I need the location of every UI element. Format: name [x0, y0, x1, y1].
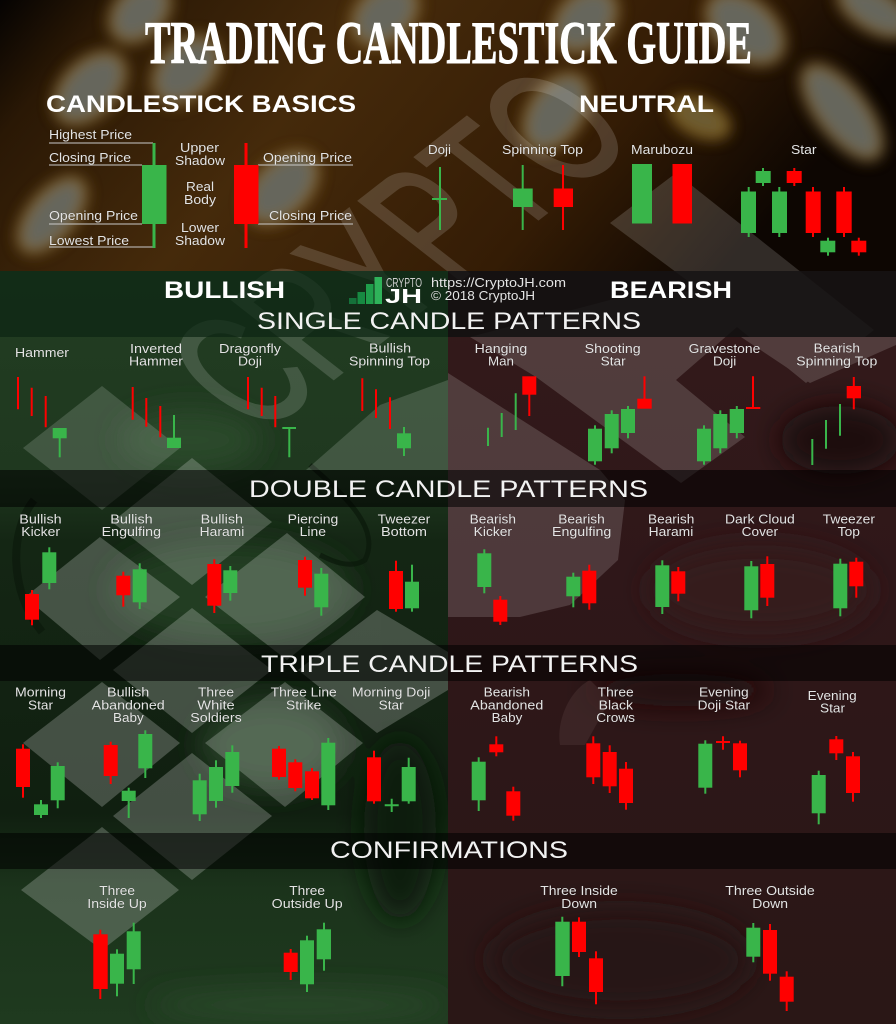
pattern: bearish harami: Bearish — [648, 512, 694, 526]
pattern: bearish spinning top: Bearish — [814, 342, 860, 356]
pattern: hammer: Hammer — [15, 346, 69, 360]
pattern: three outside down: Down — [752, 897, 788, 911]
labels centre: Shadow — [175, 234, 226, 248]
labels right: Opening Price — [263, 151, 352, 165]
panel: confirmations bearish — [540, 884, 815, 1011]
pattern: bearish abandoned baby — [470, 686, 543, 821]
pattern: three white soldiers: Soldiers — [190, 711, 242, 725]
pattern: bullish spinning top: Bullish — [369, 342, 411, 356]
heading: single candle patterns: SINGLE CANDLE PATTERNS — [257, 308, 641, 335]
pattern: bearish harami — [648, 512, 694, 614]
labels left: Highest Price — [49, 128, 132, 142]
pattern: bullish harami: Bullish — [201, 512, 243, 526]
panel: triple candle bullish — [15, 686, 430, 821]
pattern: bearish abandoned baby: Abandoned — [470, 698, 543, 712]
icon: logo bars — [349, 277, 382, 304]
pattern: inverted hammer: Hammer — [129, 354, 183, 368]
leader lines — [49, 143, 353, 247]
heading: basics: CANDLESTICK BASICS — [46, 91, 356, 118]
pattern: three black crows: Black — [599, 698, 634, 712]
pattern: dark cloud cover — [725, 512, 795, 618]
pattern: hammer — [15, 346, 69, 457]
pattern: bearish kicker: Bearish — [470, 512, 516, 526]
pattern: bullish engulfing: Bullish — [110, 512, 153, 526]
pattern: inverted hammer — [129, 342, 183, 448]
panel: single candle bearish — [475, 342, 877, 465]
panel: neutral — [428, 91, 866, 256]
pattern: morning star — [15, 686, 66, 818]
pattern: three inside down: Three Inside — [540, 884, 618, 898]
site and copyright: https://CryptoJH.com — [431, 276, 566, 290]
pattern: dark cloud cover: Cover — [742, 525, 778, 539]
pattern: piercing line: Line — [300, 525, 326, 539]
pattern: bearish abandoned baby: Bearish — [484, 686, 530, 700]
labels centre: Upper — [180, 141, 219, 155]
labels centre — [175, 141, 226, 248]
pattern: bullish abandoned baby: Baby — [113, 711, 144, 725]
pattern: spinning top: Spinning Top — [502, 143, 583, 157]
heading: bearish: BEARISH — [610, 277, 732, 304]
panel: single candle bullish — [15, 342, 430, 457]
pattern: dark cloud cover: Dark Cloud — [725, 512, 795, 526]
panel: triple candle bearish — [470, 686, 860, 824]
pattern: bearish engulfing: Engulfing — [552, 525, 611, 539]
pattern: shooting star — [585, 342, 652, 465]
panel: confirmations bullish — [87, 884, 343, 999]
pattern: morning star: Morning — [15, 686, 66, 700]
pattern: marubozu — [631, 143, 693, 224]
background: bokeh photo panel — [0, 0, 896, 271]
pattern: tweezer bottom: Tweezer — [378, 512, 430, 526]
pattern: three outside up — [272, 884, 343, 992]
pattern: bearish kicker: Kicker — [474, 525, 512, 539]
pattern: tweezer top — [823, 512, 875, 616]
pattern: star — [741, 143, 866, 256]
logo: CryptoJH: © 2018 CryptoJH — [431, 289, 535, 303]
pattern: three white soldiers: Three — [198, 686, 234, 700]
pattern: tweezer top: Tweezer — [823, 512, 875, 526]
pattern: bullish spinning top: Spinning Top — [349, 354, 430, 368]
pattern: bullish abandoned baby: Abandoned — [92, 698, 165, 712]
heading: double candle patterns: DOUBLE CANDLE PATTERNS — [249, 476, 648, 503]
pattern: evening star: Star — [820, 702, 845, 716]
heading: neutral: NEUTRAL — [579, 91, 714, 118]
pattern: shooting star: Star — [601, 354, 626, 368]
pattern: bullish harami — [200, 512, 244, 613]
pattern: bullish kicker: Bullish — [19, 512, 62, 526]
pattern: three outside up: Three — [289, 884, 325, 898]
pattern: hanging man: Man — [488, 354, 514, 368]
labels centre: Real — [186, 180, 214, 194]
pattern: bullish engulfing — [102, 512, 161, 609]
pattern: star: Star — [791, 143, 816, 157]
pattern: three outside down: Three Outside — [725, 884, 815, 898]
pattern: three line strike — [271, 686, 337, 810]
pattern: three inside up — [87, 884, 147, 999]
labels left — [49, 128, 138, 248]
pattern: bearish harami: Harami — [649, 525, 693, 539]
watermark: giant rotated logo — [23, 35, 896, 617]
pattern: piercing line — [288, 512, 338, 616]
pattern: gravestone doji — [689, 342, 760, 465]
pattern: dragonfly doji: Dragonfly — [219, 342, 282, 356]
section band: bullish bearish header — [0, 271, 896, 337]
pattern: tweezer bottom: Bottom — [381, 525, 427, 539]
pattern: three line strike: Three Line — [271, 686, 337, 700]
pattern: gravestone doji: Doji — [713, 354, 736, 368]
pattern: three inside down: Down — [561, 897, 597, 911]
pattern: shooting star: Shooting — [585, 342, 641, 356]
pattern: tweezer bottom — [378, 512, 430, 612]
pattern: evening star — [808, 689, 860, 824]
heading: bullish: BULLISH — [164, 277, 285, 304]
pattern: bullish engulfing: Engulfing — [102, 525, 161, 539]
pattern: doji — [428, 143, 451, 230]
pattern: three outside up: Outside Up — [272, 897, 343, 911]
pattern: bearish engulfing: Bearish — [558, 512, 605, 526]
pattern: marubozu: Marubozu — [631, 143, 693, 157]
pattern: inverted hammer: Inverted — [130, 342, 182, 356]
pattern: doji: Doji — [428, 143, 451, 157]
logo: CryptoJH — [349, 275, 566, 308]
pattern: three line strike: Strike — [286, 698, 321, 712]
panel: double candle bullish — [19, 512, 430, 625]
section band: double candle — [0, 470, 896, 507]
pattern: three white soldiers — [190, 686, 242, 821]
pattern: hanging man: Hanging — [475, 342, 527, 356]
pattern: evening doji star: Doji Star — [698, 698, 750, 712]
pattern: bearish spinning top — [796, 342, 877, 465]
section band: triple candle — [0, 645, 896, 681]
logo: CryptoJH: JH — [385, 286, 422, 308]
pattern: bullish harami: Harami — [200, 525, 244, 539]
pattern: bearish engulfing — [552, 512, 611, 610]
pattern: three inside up: Three — [99, 884, 135, 898]
labels right — [263, 151, 352, 223]
background: bear panel — [448, 271, 896, 1024]
labels centre: Shadow — [175, 154, 226, 168]
pattern: bullish spinning top — [349, 342, 430, 456]
pattern: three inside down — [540, 884, 618, 1004]
section band: confirmations — [0, 833, 896, 869]
pattern: morning doji star: Star — [379, 698, 404, 712]
heading: triple candle patterns: TRIPLE CANDLE PATTERNS — [261, 651, 638, 678]
labels left: Closing Price — [49, 151, 131, 165]
pattern: bullish abandoned baby — [92, 686, 165, 818]
panel: candlestick basics — [46, 91, 356, 248]
pattern: gravestone doji: Gravestone — [689, 342, 760, 356]
red candle — [234, 143, 258, 248]
pattern: bearish kicker — [470, 512, 516, 625]
pattern: three black crows: Three — [598, 686, 634, 700]
pattern: morning doji star: Morning Doji — [352, 686, 430, 700]
pattern: three white soldiers: White — [197, 698, 235, 712]
pattern: bullish kicker: Kicker — [21, 525, 60, 539]
pattern: bullish abandoned baby: Bullish — [107, 686, 149, 700]
background: bull panel — [0, 271, 450, 1024]
labels centre: Body — [184, 193, 217, 207]
pattern: bearish abandoned baby: Baby — [492, 711, 523, 725]
labels centre: Lower — [181, 221, 219, 235]
pattern: piercing line: Piercing — [288, 512, 338, 526]
pattern: hanging man — [475, 342, 536, 446]
watermark: diamond lattice — [21, 458, 448, 950]
labels left: Lowest Price — [49, 234, 129, 248]
panel: double candle bearish — [470, 512, 875, 625]
pattern: dragonfly doji — [219, 342, 296, 457]
pattern: evening doji star: Evening — [699, 686, 749, 700]
pattern: three inside up: Inside Up — [87, 897, 147, 911]
pattern: evening star: Evening — [808, 689, 857, 703]
logo wordmark: CRYPTO — [386, 275, 422, 290]
pattern: three black crows: Crows — [596, 711, 635, 725]
pattern: bullish kicker — [19, 512, 62, 625]
pattern: spinning top — [502, 143, 583, 230]
pattern: dragonfly doji: Doji — [238, 354, 262, 368]
pattern: morning star: Star — [28, 698, 53, 712]
green candle — [142, 143, 166, 248]
pattern: evening doji star — [698, 686, 750, 794]
pattern: three outside down — [725, 884, 815, 1011]
pattern: tweezer top: Top — [838, 525, 860, 539]
labels right: Closing Price — [269, 209, 352, 223]
pattern: bearish spinning top: Spinning Top — [796, 354, 877, 368]
pattern: morning doji star — [352, 686, 430, 812]
labels left: Opening Price — [49, 209, 138, 223]
pattern: three black crows — [586, 686, 635, 810]
heading: confirmations: CONFIRMATIONS — [330, 837, 568, 864]
